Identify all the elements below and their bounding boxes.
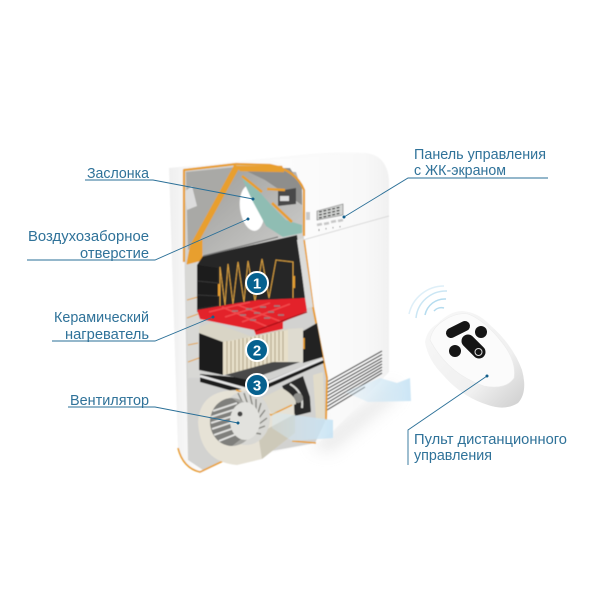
power button bbox=[468, 341, 482, 356]
control panel with LCD display bbox=[306, 204, 343, 231]
label: ceramic heater bbox=[54, 310, 149, 343]
leader line: fan bbox=[68, 407, 240, 424]
orange cut frame bbox=[178, 164, 327, 472]
remote top face bbox=[430, 314, 514, 387]
leader line: damper bbox=[85, 180, 254, 200]
shell front face bbox=[270, 153, 389, 430]
ceramic heater bbox=[197, 298, 307, 335]
label: remote control: Пульт дистанционного bbox=[414, 432, 567, 448]
label: fan: Вентилятор bbox=[70, 393, 149, 409]
air flow arrow bottom bbox=[272, 412, 333, 441]
leader line: heater bbox=[52, 316, 214, 341]
right wall strip bbox=[297, 238, 313, 308]
white outer shell bbox=[169, 152, 389, 473]
label: control panel: Панель управления bbox=[414, 147, 546, 163]
label: remote control: управления bbox=[414, 448, 492, 464]
badge 3 bbox=[246, 374, 268, 396]
signal waves bbox=[409, 286, 447, 318]
left inner wall bbox=[185, 262, 200, 378]
upper grey cavity bbox=[186, 167, 236, 250]
cutaway interior bbox=[183, 164, 327, 470]
button rocker bbox=[451, 326, 465, 333]
filter tray bbox=[200, 358, 324, 396]
LCD display bbox=[317, 204, 343, 220]
label: ceramic heater: Керамический bbox=[54, 310, 149, 326]
button N bbox=[475, 326, 487, 338]
scroll cut edge bbox=[236, 390, 292, 415]
label: air intake: отверстие bbox=[80, 246, 149, 262]
inlet opening bbox=[210, 398, 254, 446]
badge 1 bbox=[246, 272, 268, 294]
fan wheel bbox=[222, 391, 270, 445]
panel buttons bbox=[317, 220, 343, 225]
label: damper: Заслонка bbox=[87, 166, 150, 182]
remote body bbox=[425, 311, 524, 408]
button S bbox=[449, 345, 461, 357]
hub bbox=[230, 402, 260, 440]
badge 3: 3 bbox=[253, 378, 261, 394]
remote control bbox=[409, 286, 524, 408]
leader line: remote bbox=[408, 374, 488, 465]
air intake opening bbox=[237, 184, 267, 232]
label: ceramic heater: нагреватель bbox=[65, 327, 149, 343]
folded heat exchanger bbox=[220, 259, 293, 306]
black chamber bbox=[197, 235, 305, 312]
leader line: air intake bbox=[27, 218, 250, 260]
lower filter bbox=[199, 322, 323, 375]
side louvers bbox=[327, 351, 382, 410]
ventilation unit bbox=[169, 152, 411, 473]
right black block bbox=[303, 323, 323, 363]
air flow arrow right bbox=[345, 378, 411, 402]
shell seam bbox=[303, 216, 389, 240]
label: air intake: Воздухозаборное bbox=[28, 229, 149, 245]
pleats bbox=[223, 330, 288, 375]
damper flap bbox=[242, 178, 302, 237]
upper chamber bbox=[200, 168, 303, 256]
plane edge bbox=[203, 237, 278, 256]
fan motor bbox=[282, 372, 325, 420]
leader line: control panel bbox=[342, 178, 548, 218]
badge 2: 2 bbox=[253, 342, 261, 360]
label: air intake bbox=[28, 229, 149, 262]
right pleat panel bbox=[288, 328, 303, 364]
panel indicators bbox=[319, 226, 340, 231]
fan housing bbox=[198, 388, 296, 465]
left black block bbox=[199, 333, 223, 375]
label: control panel bbox=[414, 147, 546, 179]
badge 1: 1 bbox=[253, 276, 261, 292]
shadow under unit bbox=[310, 384, 398, 452]
damper hardware bbox=[184, 168, 302, 210]
filter top bbox=[199, 322, 303, 374]
filter blocks bbox=[197, 265, 295, 308]
label: remote control bbox=[414, 432, 567, 464]
label: control panel: с ЖК-экраном bbox=[414, 163, 506, 179]
badge 2 bbox=[246, 339, 268, 361]
side slot bbox=[306, 212, 310, 220]
scroll cylinder bbox=[262, 388, 296, 414]
